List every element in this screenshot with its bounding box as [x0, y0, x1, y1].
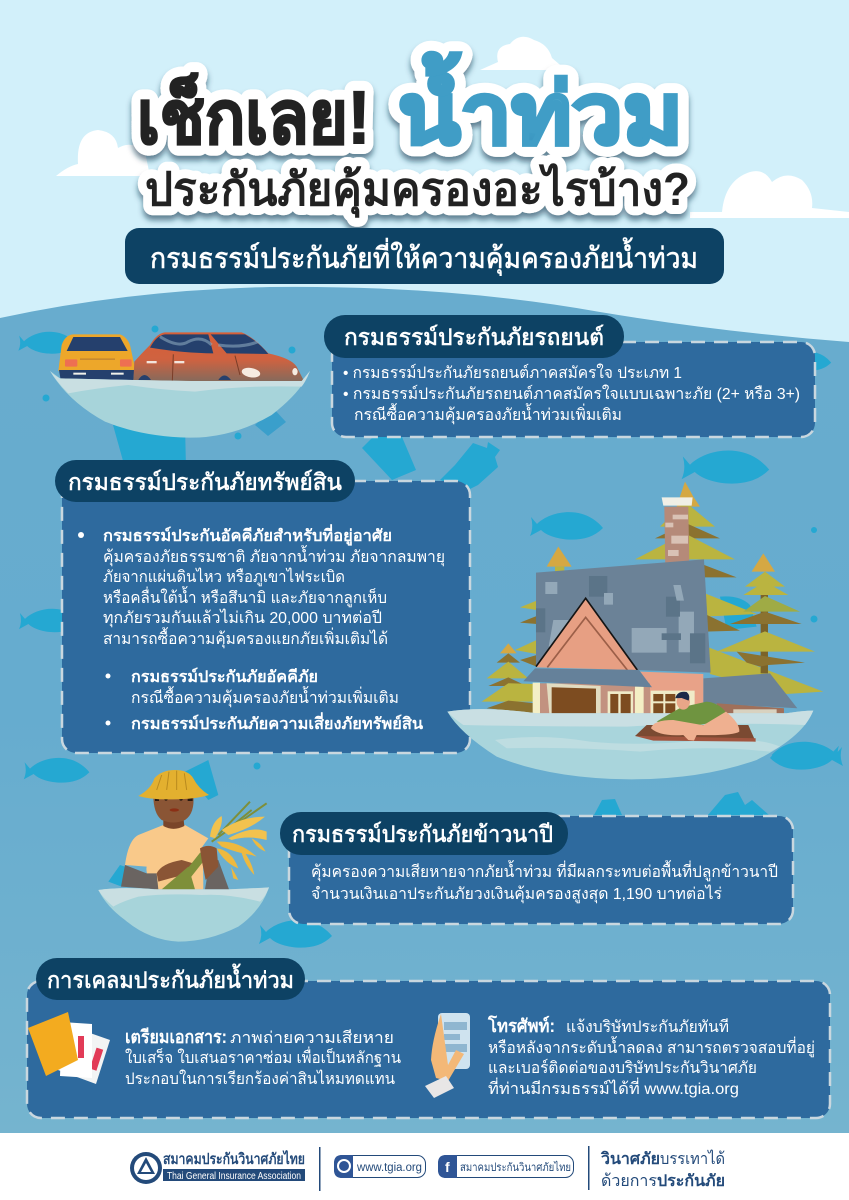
- text: phone the insurer: ที่ท่านมีกรมธรรม์ได้ที่ www.tgia.org: [488, 1077, 739, 1098]
- footer: [0, 1133, 849, 1200]
- text: prepare documents: ภาพถ่ายความเสียหาย: [230, 1029, 394, 1047]
- illustration: farmer with rice: [98, 760, 269, 942]
- fish and debris silhouettes: [18, 326, 843, 948]
- facebook badge: สมาคมประกันวินาศภัยไทย: [460, 1161, 571, 1174]
- trees: [482, 482, 823, 713]
- text: prepare documents: [125, 1027, 401, 1088]
- heading: flood claims: [36, 958, 305, 1000]
- illustration: flooded cars: [50, 332, 310, 438]
- text: residential fire policy: หรือคลื่นใต้น้ำ หรือสึนามิ และภัยจากลูกเห็บ: [103, 586, 387, 608]
- bowl of water: [447, 709, 813, 779]
- heading: flood claims: การเคลมประกันภัยน้ำท่วม: [47, 964, 294, 993]
- slogan: วินาศภัย: [600, 1150, 660, 1168]
- man on raft: [635, 692, 756, 742]
- text: prepare documents: ใบเสร็จ ใบเสนอราคาซ่อม เพื่อเป็นหลักฐาน: [125, 1046, 401, 1067]
- facebook badge: f: [445, 1159, 450, 1175]
- website badge: www.tgia.org: [356, 1162, 422, 1174]
- house gable and porch roof: [523, 598, 652, 687]
- heading: motor insurance: [324, 315, 624, 358]
- title: what insurance covers: ประกันภัยคุ้มครองอะไรบ้าง?: [145, 163, 690, 218]
- slogan: ด้วยการ: [601, 1172, 657, 1190]
- house walls and garage: [533, 672, 797, 714]
- illustration: flooded house: [447, 482, 840, 779]
- icon: hand holding phone: [425, 1013, 470, 1098]
- text: phone the insurer: [487, 1015, 815, 1098]
- association logo: สมาคมประกันวินาศภัยไทย: [163, 1149, 305, 1168]
- heading: property insurance: กรมธรรม์ประกันภัยทรัพย์สิน: [68, 469, 342, 495]
- heading: rice insurance: [280, 812, 568, 855]
- heading: rice insurance: กรมธรรม์ประกันภัยข้าวนาปี: [292, 821, 553, 847]
- text: motor policy list: • กรมธรรม์ประกันภัยรถยนต์ภาคสมัครใจ ประเภท 1: [343, 363, 682, 382]
- subtitle banner: กรมธรรม์ประกันภัยที่ให้ความคุ้มครองภัยน้ำท่วม: [150, 237, 698, 276]
- title: flood: น้ำท่วม: [398, 52, 683, 161]
- text: fire policy add-on: [106, 667, 399, 708]
- clouds: [56, 37, 849, 218]
- panel: rice insurance: [280, 812, 793, 924]
- facebook badge: [438, 1155, 574, 1178]
- title: check now: เช็กเลย!: [137, 74, 370, 159]
- debris behind farmer: [108, 760, 218, 887]
- text: motor policy list: [343, 363, 800, 425]
- text: residential fire policy: ภัยจากแผ่นดินไหว หรือภูเขาไฟระเบิด: [103, 567, 345, 587]
- title: check now: เช็กเลย!: [137, 74, 370, 159]
- panel: flood claims: [27, 958, 830, 1118]
- text: property all risk policy: กรมธรรม์ประกันภัยความเสี่ยงภัยทรัพย์สิน: [131, 712, 423, 733]
- association logo: [130, 1149, 305, 1184]
- sea background: [0, 287, 849, 1134]
- text: rice coverage: จำนวนเงินเอาประกันภัยวงเงินคุ้มครองสูงสุด 1,190 บาทต่อไร่: [311, 884, 722, 904]
- rice sheaf: [162, 802, 267, 889]
- farmer: [121, 770, 229, 889]
- text: residential fire policy: สามารถซื้อความคุ้มครองแยกภัยเพิ่มเติมได้: [103, 627, 388, 649]
- heading: motor insurance: กรมธรรม์ประกันภัยรถยนต์: [344, 324, 604, 350]
- text: residential fire policy: กรมธรรม์ประกันอัคคีภัยสำหรับที่อยู่อาศัย: [103, 524, 392, 547]
- title: flood: น้ำท่วม: [398, 52, 683, 161]
- text: residential fire policy: [78, 524, 445, 649]
- panel: motor insurance: [324, 315, 815, 437]
- text: fire policy add-on: กรมธรรม์ประกันภัยอัคคีภัย: [131, 667, 318, 686]
- text: phone the insurer: และเบอร์ติดต่อของบริษัทประกันวินาศภัย: [488, 1058, 757, 1077]
- text: motor policy list: • กรมธรรม์ประกันภัยรถยนต์ภาคสมัครใจแบบเฉพาะภัย (2+ หรือ 3+): [343, 384, 800, 403]
- text: motor policy list: กรณีซื้อความคุ้มครองภัยน้ำท่วมเพิ่มเติม: [354, 403, 622, 425]
- text: fire policy add-on: กรณีซื้อความคุ้มครองภัยน้ำท่วมเพิ่มเติม: [131, 686, 399, 708]
- website badge: [334, 1155, 426, 1178]
- bowl of water: [50, 371, 310, 438]
- heading: property insurance: [55, 460, 355, 502]
- text: phone the insurer: หรือหลังจากระดับน้ำลดลง สามารถตรวจสอบที่อยู่: [488, 1036, 815, 1058]
- slogan: บรรเทาได้: [660, 1149, 725, 1168]
- text: phone the insurer: โทรศัพท์:: [487, 1015, 555, 1036]
- text: rice coverage: คุ้มครองความเสียหายจากภัยน้ำท่วม ที่มีผลกระทบต่อพื้นที่ปลูกข้าวนาปี: [311, 860, 778, 882]
- title: what insurance covers: ประกันภัยคุ้มครองอะไรบ้าง?: [145, 163, 690, 218]
- icon: yellow car: [58, 334, 136, 380]
- title: [137, 52, 690, 218]
- house roof and chimney: [536, 497, 711, 673]
- text: residential fire policy: ทุกภัยรวมกันแล้วไม่เกิน 20,000 บาทต่อปี: [103, 608, 382, 628]
- text: phone the insurer: แจ้งบริษัทประกันภัยทันที: [566, 1018, 729, 1036]
- slogan: [600, 1149, 725, 1190]
- text: rice coverage: [311, 860, 778, 904]
- panel: property insurance: [55, 460, 470, 753]
- icon: documents and folder: [28, 1012, 110, 1084]
- text: residential fire policy: คุ้มครองภัยธรรมชาติ ภัยจากน้ำท่วม ภัยจากลมพายุ: [103, 545, 445, 567]
- bowl of water: [98, 887, 269, 942]
- text: prepare documents: ประกอบในการเรียกร้องค่าสินไหมทดแทน: [125, 1069, 395, 1088]
- text: prepare documents: เตรียมเอกสาร:: [125, 1027, 227, 1047]
- subtitle banner: [125, 228, 724, 284]
- association logo: Thai General Insurance Association: [167, 1171, 301, 1182]
- icon: red car: [133, 332, 304, 382]
- slogan: ประกันภัย: [657, 1172, 725, 1190]
